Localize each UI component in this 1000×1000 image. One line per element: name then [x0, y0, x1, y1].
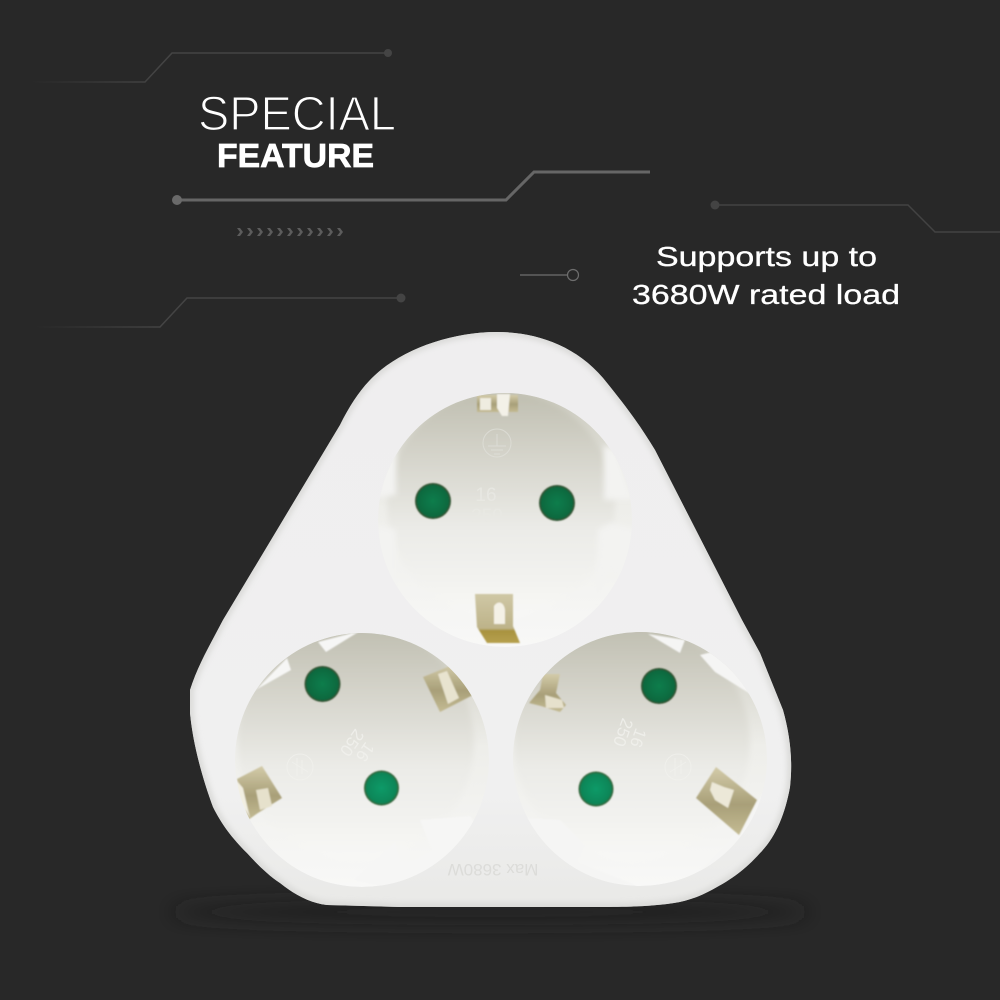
moulded rating: Max 3680W — [448, 860, 538, 879]
title — [198, 88, 396, 174]
product shadow — [170, 902, 810, 922]
chevron row — [237, 228, 343, 236]
moulded marks: 250 — [471, 506, 503, 527]
socket pins — [304, 666, 399, 806]
moulded marks: 16 — [475, 485, 497, 506]
socket: bottom left — [236, 633, 487, 887]
clip right — [423, 664, 473, 712]
clip right — [696, 767, 757, 835]
callout text: Supports up to — [656, 241, 877, 272]
moulded marks: 16 — [626, 726, 650, 750]
side tabs — [381, 445, 630, 538]
ground clip bottom — [475, 594, 520, 643]
circuit line: mid left — [35, 294, 406, 327]
moulded earth mark — [483, 429, 511, 457]
product: triple socket adapter — [170, 332, 810, 922]
tabs — [648, 634, 748, 693]
title: SPECIAL — [198, 88, 396, 141]
moulded earth mark — [287, 754, 313, 780]
circuit line: under title — [172, 172, 650, 205]
socket floor — [516, 632, 748, 756]
moulded marks: 250 — [336, 726, 368, 760]
moulded marks: 250 — [609, 716, 637, 749]
circuit line: top left — [30, 49, 392, 82]
clip left — [237, 766, 282, 820]
tabs — [257, 633, 358, 690]
circuit line: top right — [710, 200, 1000, 232]
moulded marks: 16 — [352, 739, 378, 765]
circuit line: callout connector — [520, 270, 578, 280]
title: FEATURE — [217, 137, 374, 174]
socket: top — [382, 393, 618, 647]
clip left — [529, 674, 566, 712]
moulded earth mark — [665, 754, 691, 780]
socket floor — [388, 393, 614, 517]
moulded marks — [478, 488, 495, 493]
moulded marks — [341, 728, 373, 757]
callout text: 3680W rated load — [632, 279, 900, 310]
ground clip top — [477, 394, 518, 416]
socket pins — [415, 483, 575, 521]
adapter body — [190, 332, 791, 907]
moulded marks — [614, 718, 646, 747]
socket pins — [578, 668, 677, 806]
callout text — [632, 241, 900, 310]
socket floor — [240, 633, 472, 756]
body edge shading — [190, 332, 791, 907]
socket: bottom right — [513, 625, 780, 886]
